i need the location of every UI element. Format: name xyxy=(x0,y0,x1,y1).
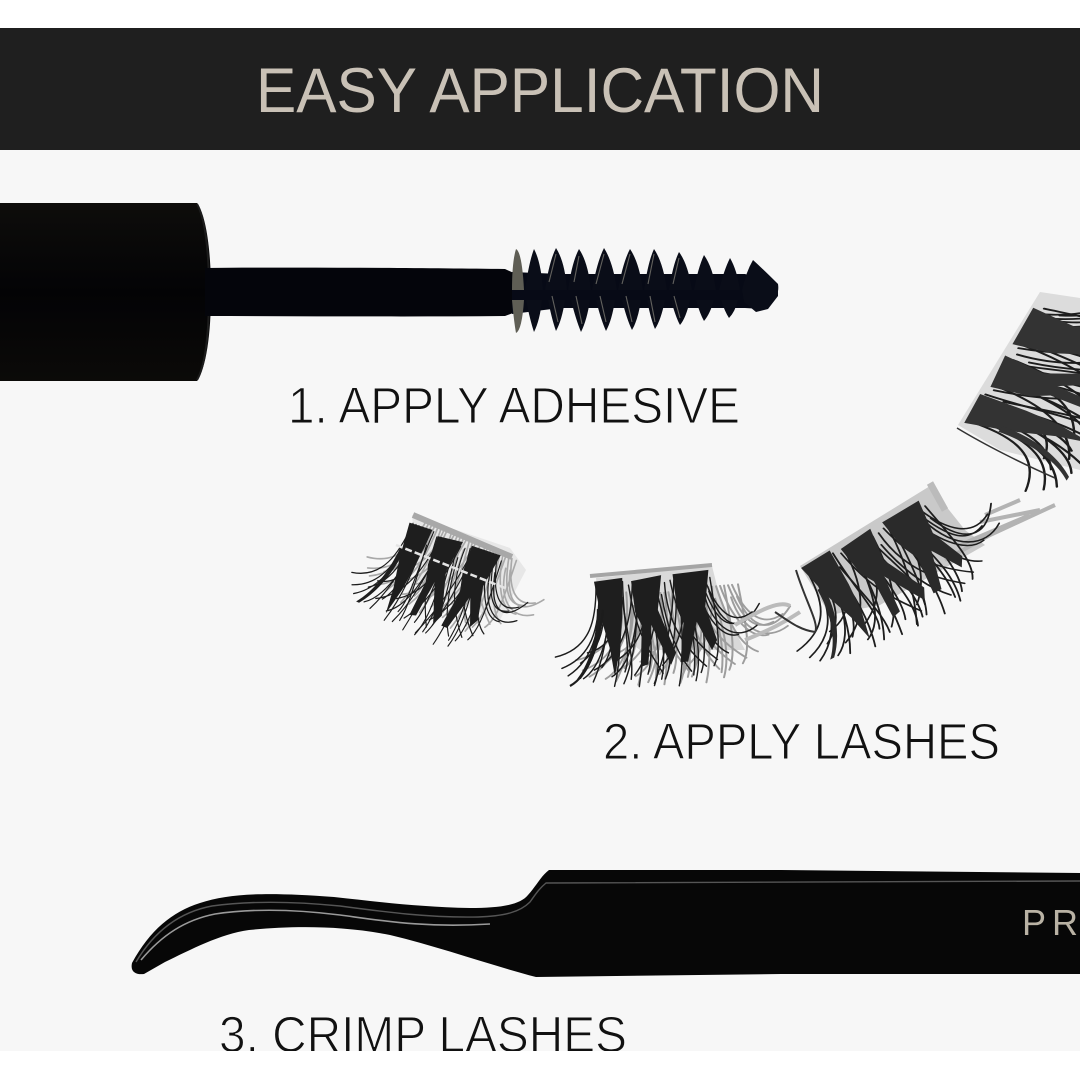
tweezers xyxy=(132,870,1080,977)
wand cap xyxy=(0,203,211,381)
lash segment: left xyxy=(338,503,555,671)
step 1 label: 1. APPLY ADHESIVE xyxy=(288,377,740,434)
step 2 label: 2. APPLY LASHES xyxy=(603,713,1000,770)
lash segment: upper right xyxy=(939,261,1080,504)
mascara wand with cap xyxy=(0,203,778,381)
lash segment: centre xyxy=(550,565,800,694)
lash segment: right xyxy=(758,478,1055,681)
step 3 label: 3. CRIMP LASHES xyxy=(219,1006,627,1063)
adhesive brush xyxy=(512,248,778,333)
wand stem xyxy=(205,268,516,316)
title: EASY APPLICATION xyxy=(256,56,824,126)
title band xyxy=(0,28,1080,150)
bottom white strip xyxy=(0,1051,1080,1080)
